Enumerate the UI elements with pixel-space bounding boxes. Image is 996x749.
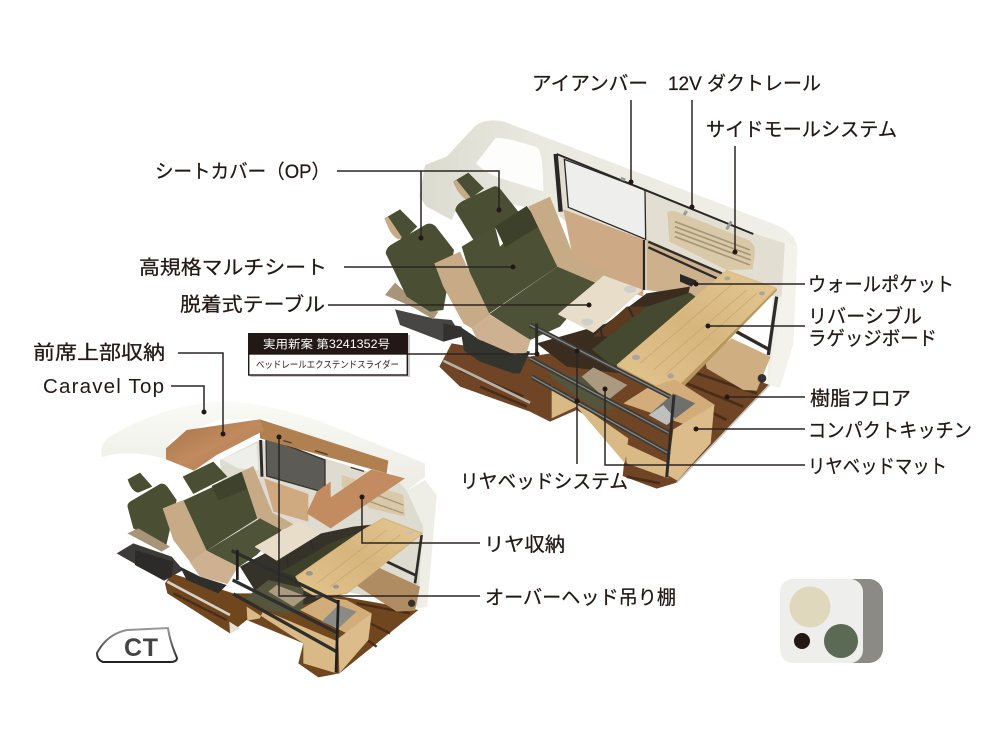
label: シートカバー（OP） [155,161,502,240]
reversible board [296,518,422,597]
front window opening [222,443,258,470]
bench headrest [495,206,541,247]
badge: utility model number: ベッドレールエクステンドスライダー [256,359,399,371]
table [559,277,641,337]
mat green base [547,373,613,410]
vent panel [667,211,755,270]
label: Caravel Top [43,375,206,414]
bench seat [489,267,597,340]
bench front tan cushion [472,315,531,355]
front seat base [127,528,170,552]
bench right bolster [242,466,273,518]
label: アイアンバー: アイアンバー [532,73,648,95]
front seat back [386,224,454,312]
label: 樹脂フロア [724,388,911,410]
front headrest [385,209,417,239]
wood step block [552,385,628,463]
rear headrest 2 side [453,180,471,200]
label: コンパクトキッチン: コンパクトキッチン [808,420,972,442]
seat 2 [183,462,227,494]
interior dark floor gap [537,287,690,373]
label: 脱着式テーブル [180,293,592,316]
brown under table [593,307,647,337]
label: コンパクトキッチン [694,420,972,442]
label: リバーシブルラゲッジボード: ラゲッジボード [808,328,937,350]
badge: utility model number [248,333,540,377]
roof [101,402,425,491]
label: リヤベッドマット [602,386,947,478]
label: アイアンバー [532,73,648,184]
side window [266,437,325,493]
label: リヤ収納: リヤ収納 [484,534,565,556]
window opening [476,138,543,192]
bench back [462,207,557,314]
label: 12V ダクトレール: 12V ダクトレール [668,73,821,95]
mat green base [245,580,303,613]
badge: CT logo: CT [124,634,158,662]
bench left bolster [163,500,207,562]
right rail frame [733,297,777,355]
label: リヤベッドシステム [460,348,628,493]
label: 高規格マルチシート: 高規格マルチシート [139,257,327,279]
label: 前席上部収納 [33,342,226,436]
label: リバーシブルラゲッジボード: リバーシブル [808,305,922,328]
floor edge line [677,385,769,483]
bed mat [282,523,383,587]
floor [165,573,418,677]
window pillar [261,440,262,477]
table [256,523,320,568]
right rail frame [383,535,422,583]
rear mat [268,585,307,607]
badge: CT logo [97,628,177,662]
label: サイドモールシステム: サイドモールシステム [706,119,897,141]
interior back [220,440,423,607]
right storage box [353,567,420,612]
bench front cushion [189,551,238,584]
floor [439,343,769,489]
label: オーバーヘッド吊り棚: オーバーヘッド吊り棚 [485,587,676,609]
iron bar [557,154,753,234]
rear bed rails [232,550,338,673]
front seat base [385,283,438,319]
illustration: standard van cutaway [385,120,797,489]
step sill [443,361,530,403]
bed mat [592,293,700,367]
van shell [419,120,797,387]
side overhead storage [260,419,388,473]
label: リヤベッドマット: リヤベッドマット [808,456,947,478]
rear bed rails [530,323,674,477]
floor dark planks [460,370,757,483]
bench rear cushion [257,513,295,531]
bench right bolster [528,197,574,267]
right shell [407,480,437,609]
label: オーバーヘッド吊り棚 [276,434,676,609]
right white pillar [769,242,797,387]
bench left bolster [434,252,490,328]
rear headrest 2 [453,173,484,199]
label: Caravel Top: Caravel Top [43,375,164,398]
seat box [395,309,462,342]
wall pocket area [644,239,725,297]
wood wall [264,478,308,522]
dark zone under table [240,523,383,607]
label: リバーシブルラゲッジボード [706,305,937,350]
floor planks [173,593,410,647]
front seat headrest [128,473,152,493]
seat back 2 [455,186,518,243]
label: ウォールポケット [694,274,954,296]
badge: utility model number: 実用新案 第3241352号 [263,337,390,351]
seat box [117,543,183,581]
label: 12V ダクトレール [668,73,821,210]
bench base [180,567,227,593]
front overhead storage [166,419,264,471]
bench headrest [212,472,248,501]
swatch: black [794,633,810,649]
rear wall [557,153,785,297]
side window [564,159,646,239]
step sill [167,582,230,615]
label: 前席上部収納: 前席上部収納 [33,342,165,364]
rear mat [582,367,627,401]
bench back [183,472,257,551]
front headrest side [385,217,402,239]
label: リヤ収納 [360,494,565,556]
swatch: beige [790,586,830,628]
right storage box [705,338,771,391]
label: 脱着式テーブル: 脱着式テーブル [180,293,325,316]
label: 高規格マルチシート [139,257,516,279]
colour swatch panel [780,579,883,663]
front seat back [127,484,177,547]
illustration: Caravel Top van cutaway [101,402,437,677]
bench dark base [460,327,530,373]
step white [229,622,240,634]
label: サイドモールシステム [706,119,897,254]
reversible board [617,271,776,395]
window frame [556,154,561,212]
label: ウォールポケット: ウォールポケット [808,274,954,296]
kitchen [623,379,715,481]
wood block [247,607,338,673]
label: シートカバー（OP）: シートカバー（OP） [155,161,330,183]
bench seat [207,518,282,567]
kitchen [300,597,372,673]
swatch: green [824,624,858,658]
vent panel [342,475,405,517]
rear overhead storage [307,469,405,528]
bench rear tan cushion [557,256,613,284]
label: リヤベッドシステム: リヤベッドシステム [460,471,628,493]
lower wood wall [563,209,643,297]
label: 樹脂フロア: 樹脂フロア [810,388,911,410]
cabinet handles [283,441,364,471]
bar hooks [621,178,731,229]
